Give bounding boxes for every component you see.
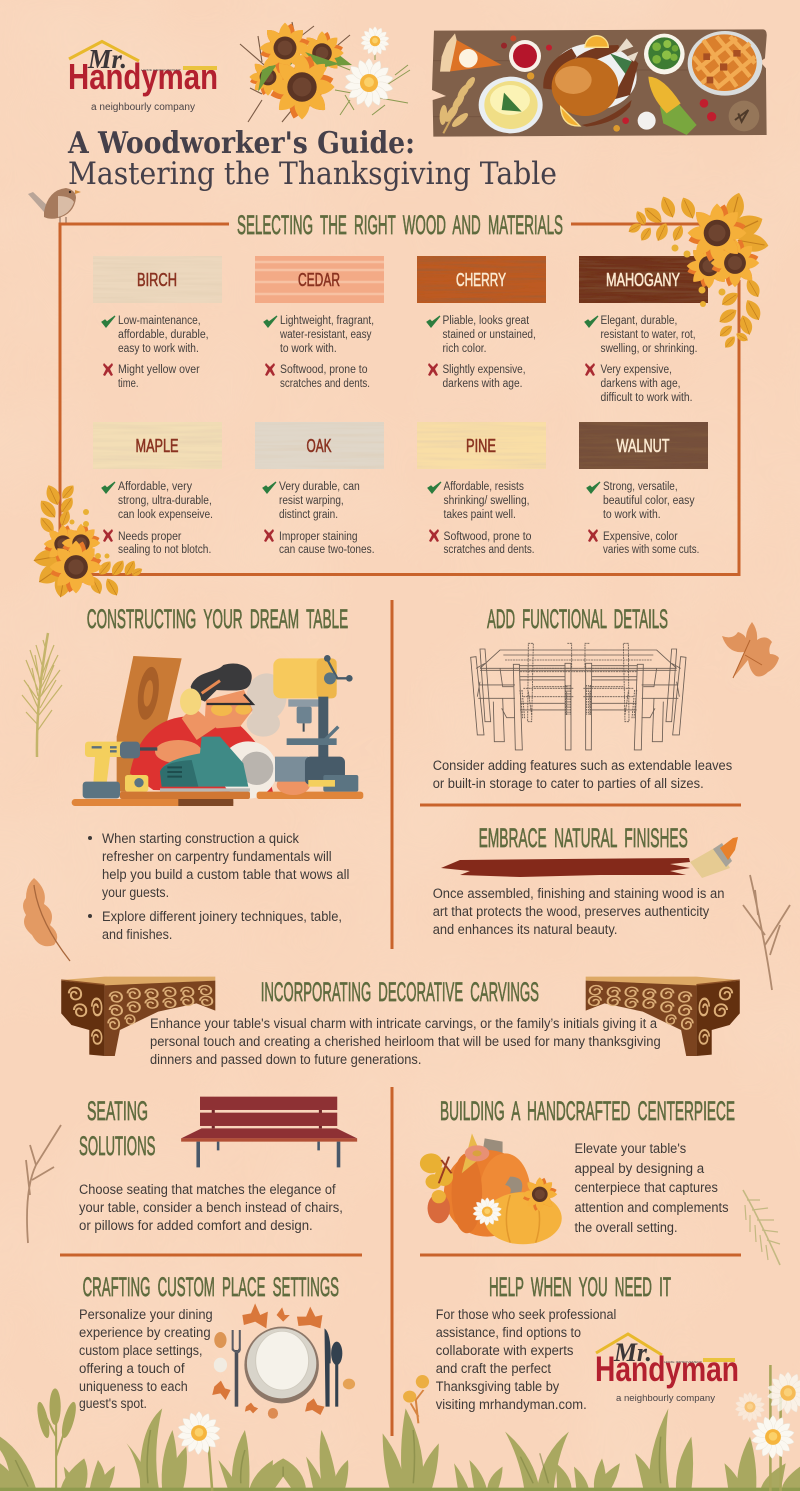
corn cob: [648, 77, 697, 135]
panel: birch: Might yellow over: [118, 364, 200, 376]
panel: cherry: stained or unstained,: [442, 329, 536, 341]
panel: walnut: [579, 422, 708, 556]
text: natural finishes: art that protects the wood, preserves authenticity: [433, 904, 709, 919]
text: place settings: custom place settings,: [79, 1343, 202, 1358]
icon: bare twig right: [743, 875, 790, 990]
icon: bare twig left: [26, 1125, 61, 1243]
text: seating: Choose seating that matches the elegance of: [79, 1182, 336, 1197]
panel: birch: affordable, durable,: [118, 329, 209, 341]
illustration: woodworker with power tools: [72, 655, 363, 806]
text: SOLUTIONS: [79, 1131, 156, 1161]
panel: oak: distinct grain.: [279, 509, 338, 521]
panel: walnut: beautiful color, easy: [603, 495, 695, 507]
text: functional details: or built-in storage to cater to parties of all sizes.: [433, 776, 704, 791]
panel: cherry: darkens with age.: [442, 378, 522, 390]
panel: walnut: varies with some cuts.: [603, 544, 699, 556]
text: natural finishes: [433, 886, 724, 937]
text: natural finishes: and enhances its natural beauty.: [433, 922, 617, 937]
heading: seating solutions: SEATING: [87, 1096, 148, 1126]
logo: Mr. Handyman: [68, 42, 218, 113]
icon: pale grass sprig: [22, 633, 62, 757]
text: place settings: experience by creating: [79, 1325, 211, 1340]
panel: oak: Very durable, can: [279, 481, 360, 493]
panel: pine: PINE: [466, 436, 496, 456]
icon: bird on frame: [28, 188, 81, 223]
panel: walnut: to work with.: [603, 509, 661, 521]
panel: birch: time.: [118, 378, 138, 390]
text: centerpiece: Elevate your table's: [574, 1141, 686, 1156]
icon: oak leaf: [23, 878, 70, 961]
logo: Mr. Handyman footer: HOME IMPROVEMENT: [664, 1360, 702, 1364]
panel: pine: shrinking/ swelling,: [444, 495, 530, 507]
text: construction bullets: refresher on carpentry fundamentals will: [102, 849, 332, 864]
text: help: collaborate with experts: [436, 1343, 574, 1358]
logo: Mr. Handyman footer: [595, 1334, 739, 1404]
text: natural finishes: Once assembled, finishing and staining wood is an: [433, 886, 724, 901]
illustration: sunflower and daisy bouquet: [240, 22, 410, 122]
panel: cherry: rich color.: [442, 343, 486, 355]
icon: paint brush and stain stroke: [441, 837, 738, 878]
illustration: grass and flowers border: [0, 1365, 800, 1491]
illustration: pumpkin centerpiece: [420, 1133, 562, 1244]
panel: mahogany: resistant to water, rot,: [600, 329, 696, 341]
text: functional details: Consider adding features such as extendable leaves: [433, 758, 732, 773]
panel: pine: Affordable, resists: [444, 481, 524, 493]
panel: cedar: to work with.: [280, 343, 337, 355]
logo: Mr. Handyman footer: Handyman: [595, 1350, 739, 1389]
divider: lower vertical: [60, 1087, 741, 1436]
title: Mastering the Thanksgiving Table: [68, 156, 557, 192]
panel: walnut: Expensive, color: [603, 531, 678, 543]
text: decorative carvings: [150, 1016, 661, 1067]
icon: maple leaf: [722, 622, 779, 678]
panel: oak: OAK: [306, 436, 332, 456]
panel: maple: sealing to not blotch.: [118, 544, 211, 556]
text: decorative carvings: personal touch and creating a cherished heirloom that will be used for many thanksgiving: [150, 1034, 661, 1049]
illustration: bench: [181, 1097, 357, 1167]
logo: Mr. Handyman: Handyman: [68, 56, 218, 97]
panel: pine: takes paint well.: [444, 509, 516, 521]
panel: mahogany: Very expensive,: [600, 364, 672, 376]
text: centerpiece: attention and complements: [574, 1200, 729, 1215]
panel: pine: scratches and dents.: [444, 544, 534, 556]
text: construction bullets: When starting construction a quick: [102, 831, 299, 846]
panel: birch: BIRCH: [137, 270, 177, 290]
text: seating: or pillows for added comfort and design.: [79, 1218, 313, 1233]
title: A Woodworker's Guide:: [67, 126, 415, 161]
wheat: [439, 75, 477, 133]
panel: mahogany: swelling, or shrinking.: [600, 343, 698, 355]
citrus slices: [561, 36, 608, 126]
text: help: and craft the perfect: [436, 1361, 551, 1376]
icon: fern sprig: [743, 1190, 780, 1265]
panel: maple: Needs proper: [118, 531, 182, 543]
text: seating: your table, consider a bench instead of chairs,: [79, 1200, 343, 1215]
text: place settings: uniqueness to each: [79, 1379, 188, 1394]
text: centerpiece: [574, 1141, 729, 1235]
bread roll: [729, 101, 759, 131]
text: place settings: [79, 1307, 213, 1411]
berries and salt: [501, 35, 716, 132]
logo: Mr. Handyman: Mr.: [87, 44, 127, 74]
logo: Mr. Handyman: a neighbourly company: [91, 102, 195, 113]
text: decorative carvings: dinners and passed down to future generations.: [150, 1052, 421, 1067]
text: help: assistance, find options to: [436, 1325, 581, 1340]
lattice pie: [688, 31, 762, 96]
panel: mahogany: [579, 256, 708, 404]
text: construction bullets: [88, 831, 349, 942]
panel: oak: [255, 422, 384, 556]
panel: cedar: [255, 256, 384, 390]
panel: maple: Affordable, very: [118, 481, 192, 493]
text: seating: [79, 1182, 343, 1233]
panel: mahogany: difficult to work with.: [600, 392, 692, 404]
panel: cherry: Slightly expensive,: [442, 364, 526, 376]
text: centerpiece: the overall setting.: [574, 1220, 678, 1235]
panel: cedar: Softwood, prone to: [280, 364, 368, 376]
panel: mahogany: Elegant, durable,: [600, 315, 677, 327]
illustration: wireframe table and chairs: [471, 643, 686, 750]
title: [67, 126, 557, 192]
illustration: carved table corner left: [61, 977, 215, 1056]
text: help: visiting mrhandyman.com.: [436, 1397, 587, 1412]
text: place settings: Personalize your dining: [79, 1307, 213, 1322]
panel: maple: can look expenseive.: [118, 509, 213, 521]
panel: birch: [93, 256, 222, 390]
panel: birch: easy to work with.: [118, 343, 199, 355]
panel: cedar: water-resistant, easy: [279, 329, 372, 341]
illustration: Thanksgiving feast on wooden board: [432, 29, 767, 137]
heading: constructing your dream table: CONSTRUCTING YOUR DREAM TABLE: [87, 604, 348, 634]
panel: walnut: Strong, versatile,: [603, 481, 678, 493]
panel: mahogany: MAHOGANY: [606, 270, 680, 290]
panel: maple: [93, 422, 222, 556]
text: centerpiece: appeal by designing a: [574, 1161, 705, 1176]
text: construction bullets: your guests.: [102, 885, 169, 900]
text: place settings: offering a touch of: [79, 1361, 185, 1376]
panel: mahogany: darkens with age,: [600, 378, 680, 390]
panel: cedar: CEDAR: [298, 270, 340, 290]
panel: maple: strong, ultra-durable,: [118, 495, 212, 507]
panel: pine: Softwood, prone to: [444, 531, 532, 543]
panel: oak: Improper staining: [279, 531, 358, 543]
text: CRAFTING CUSTOM PLACE SETTINGS: [83, 1272, 339, 1302]
cranberry bowl: [509, 40, 541, 72]
panel: oak: can cause two-tones.: [279, 544, 374, 556]
illustration: carved table corner right: [586, 977, 740, 1056]
heading: seating solutions: [79, 1096, 156, 1161]
text: centerpiece: centerpiece that captures: [574, 1180, 718, 1195]
panel: oak: resist warping,: [279, 495, 344, 507]
panel: cherry: CHERRY: [456, 270, 506, 290]
illustration: place setting with leaves: [212, 1303, 355, 1419]
pea bowl: [644, 34, 685, 74]
pie slice: [440, 33, 502, 72]
divider: upper vertical: [392, 600, 741, 949]
text: place settings: guest's spot.: [79, 1396, 147, 1411]
panel: birch: Low-maintenance,: [118, 315, 201, 327]
mashed potato plate: [479, 77, 543, 133]
panel: walnut: WALNUT: [616, 436, 670, 456]
section frame: wood and materials: [60, 224, 739, 574]
illustration: top-right floral corner: [627, 191, 770, 350]
text: construction bullets: and finishes.: [102, 927, 172, 942]
text: construction bullets: help you build a custom table that wows all: [102, 867, 349, 882]
logo: Mr. Handyman footer: a neighbourly company: [616, 1393, 715, 1404]
text: help: [436, 1307, 616, 1412]
panel: pine: [417, 422, 546, 556]
text: decorative carvings: Enhance your table's visual charm with intricate carvings, or the family’s initials giving it a: [150, 1016, 657, 1031]
roast turkey: [543, 38, 638, 127]
panel: cedar: scratches and dents.: [280, 378, 370, 390]
panel: cedar: Lightweight, fragrant,: [280, 315, 374, 327]
text: construction bullets: Explore different joinery techniques, table,: [102, 909, 342, 924]
illustration: bottom-left floral corner: [32, 483, 144, 599]
logo: Mr. Handyman: HOME IMPROVEMENT: [141, 68, 181, 72]
text: help: Thanksgiving table by: [436, 1379, 559, 1394]
logo: Mr. Handyman footer: Mr.: [613, 1338, 652, 1367]
text: functional details: [433, 758, 732, 791]
panel: maple: MAPLE: [136, 436, 178, 456]
panel: cherry: Pliable, looks great: [442, 315, 530, 327]
text: help: For those who seek professional: [436, 1307, 616, 1322]
panel: cherry: [417, 256, 546, 390]
